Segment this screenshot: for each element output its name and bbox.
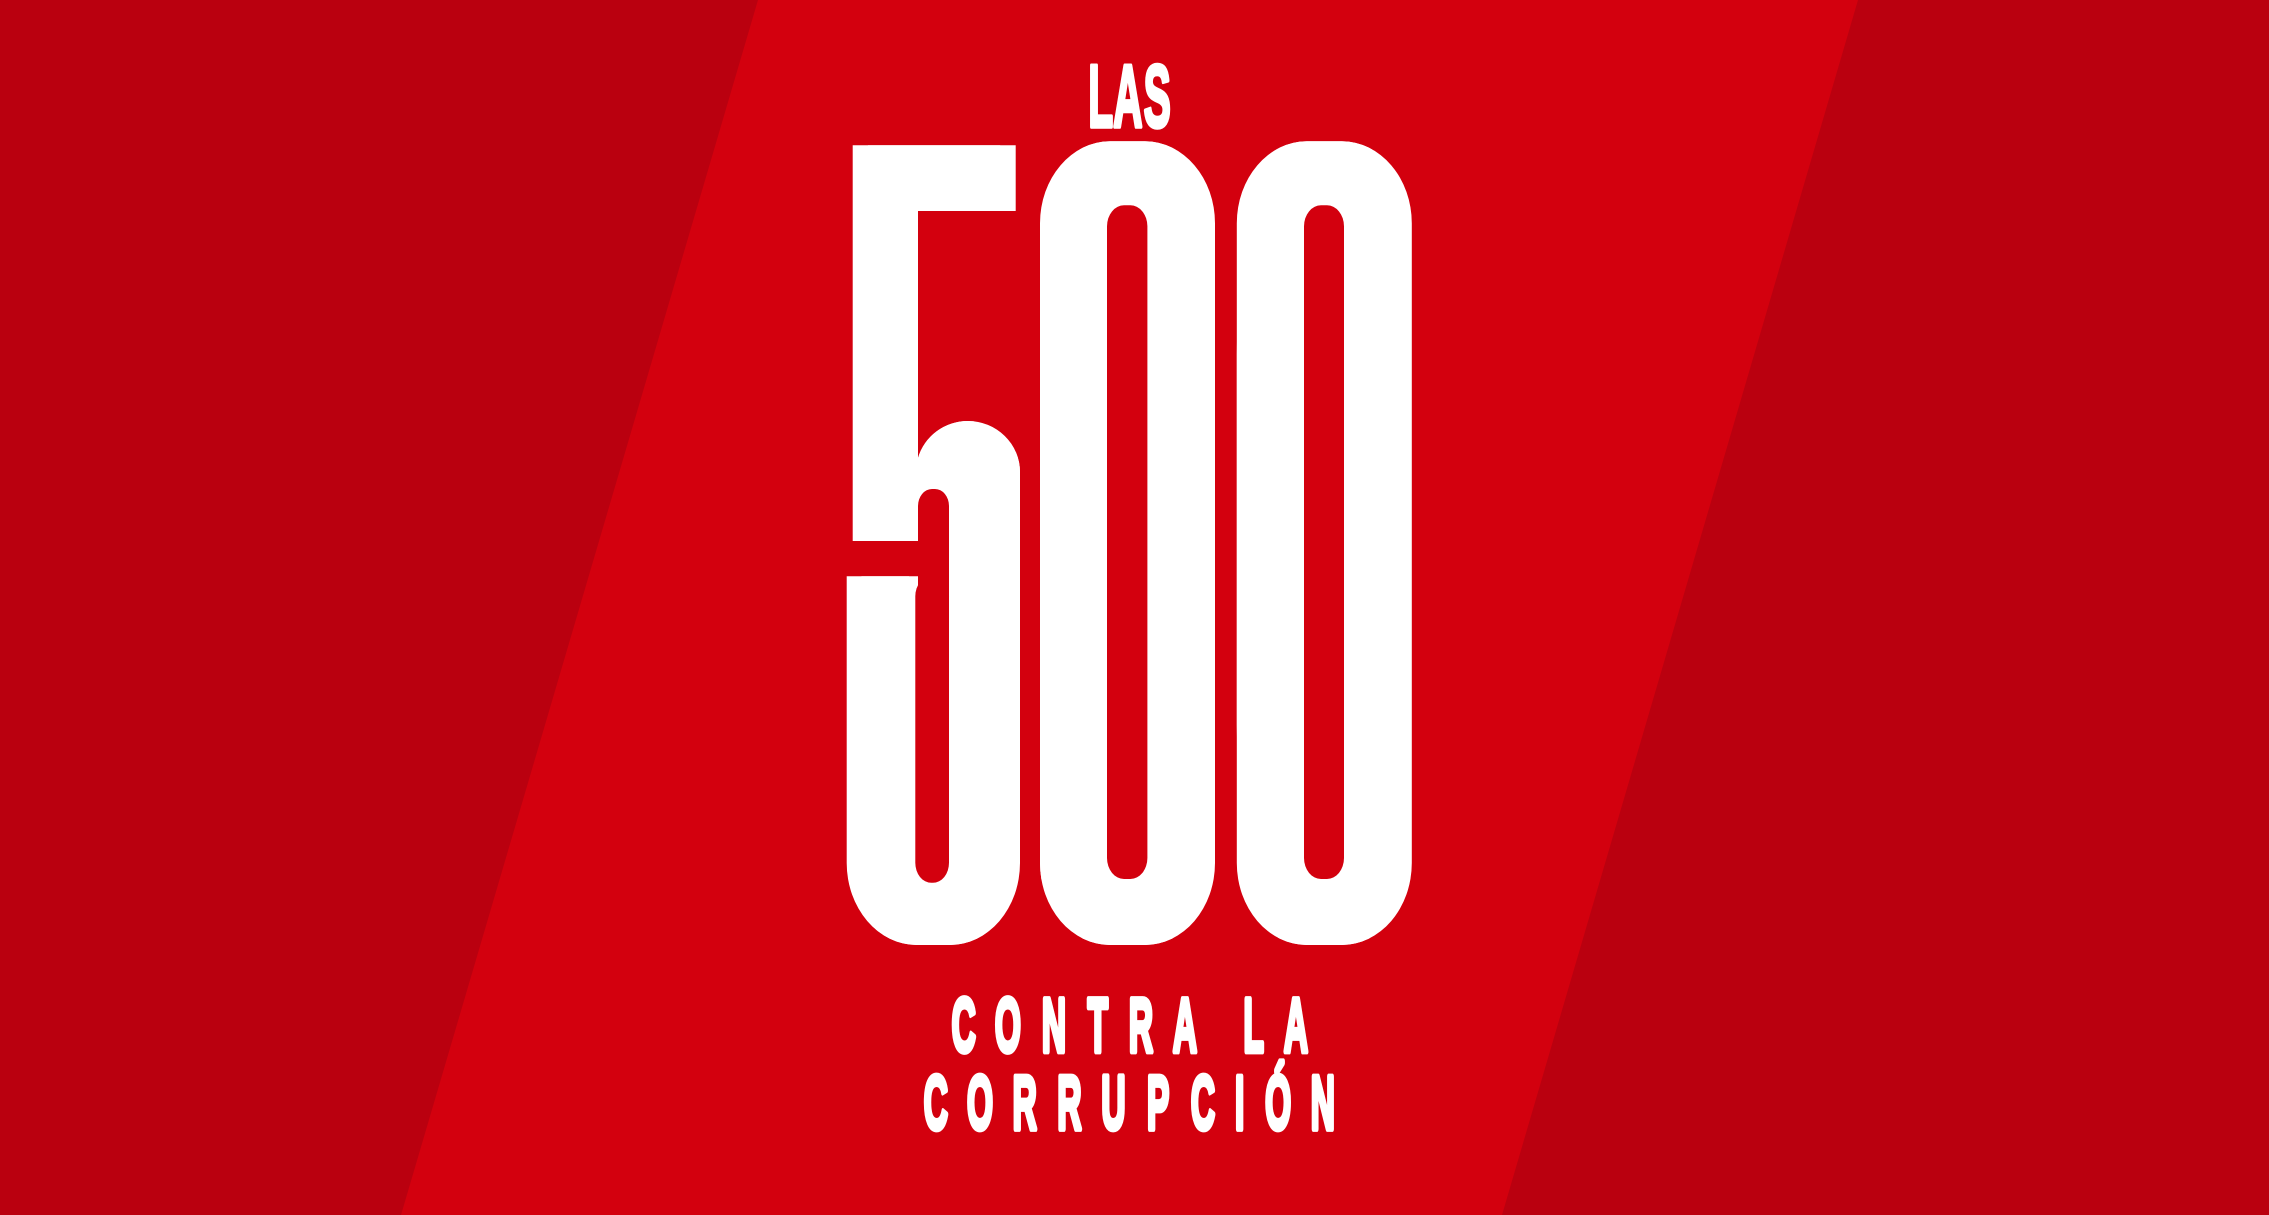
panel: left dark diagonal band bbox=[0, 0, 758, 1215]
first 0 detail: counter bbox=[1107, 205, 1147, 879]
5 detail: counter lower bbox=[915, 576, 949, 883]
subheading line: CONTRA LA: CONTRA LA bbox=[952, 984, 1308, 1068]
second 0 detail: counter bbox=[1304, 205, 1344, 879]
subheading line: CORRUPCIÓN: CORRUPCIÓN bbox=[924, 1060, 1335, 1146]
5 detail: counter upper bbox=[918, 489, 949, 619]
title number: 500 bbox=[846, 141, 1412, 945]
panel: right dark diagonal band bbox=[1502, 0, 2269, 1215]
heading: LAS: LAS bbox=[1088, 47, 1171, 146]
